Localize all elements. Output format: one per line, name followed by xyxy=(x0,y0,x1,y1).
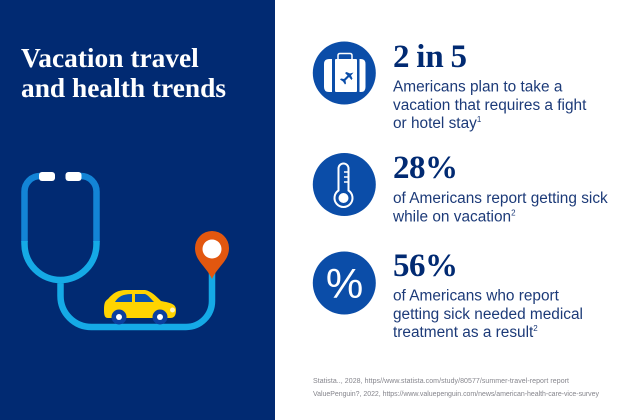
footnotes xyxy=(313,378,600,398)
stat description: 2 xyxy=(533,324,538,333)
stat description: vacation that requires a fight xyxy=(393,97,587,114)
stat description: of Americans who report xyxy=(393,288,560,304)
icon: percent sign: % xyxy=(326,260,363,307)
stat 1: 2 in 5 xyxy=(313,39,587,132)
icon: thermometer xyxy=(313,153,376,216)
stat description: getting sick needed medical xyxy=(393,306,583,323)
stat description: treatment as a result xyxy=(393,324,538,341)
icon: yellow car xyxy=(104,290,176,324)
stat description: Americans plan to take a xyxy=(393,78,563,96)
stat number: 28% xyxy=(393,150,458,186)
stethoscope upper tubes xyxy=(24,176,96,242)
footnote 1: Statista.., 2028, https//www.statista.com/study/80577/summer-travel-report report xyxy=(313,378,569,385)
panel: left navy background xyxy=(0,0,275,420)
icon: location pin xyxy=(195,231,229,279)
stethoscope ear tips xyxy=(39,172,82,181)
stethoscope lower tube and road xyxy=(24,241,212,327)
stat description: 2 xyxy=(511,208,516,218)
icon: percent sign xyxy=(313,252,376,314)
footnote 2: ValuePenguin?, 2022, https://www.valuepenguin.com/news/american-health-care-vice-survey xyxy=(313,391,600,398)
stat number: 56% xyxy=(393,248,458,284)
stat description: 1 xyxy=(477,115,482,124)
stat number: 2 in 5 xyxy=(393,39,467,75)
stat 2: 28% xyxy=(313,150,608,226)
stat description: of Americans report getting sick xyxy=(393,190,608,207)
stat description: or hotel stay xyxy=(393,115,482,132)
title: and health trends xyxy=(21,73,226,103)
icon: suitcase with plane xyxy=(313,42,376,104)
title: Vacation travel xyxy=(21,43,199,73)
icon: stethoscope road with car and pin xyxy=(24,172,229,327)
stat description: while on vacation xyxy=(392,208,516,226)
stat 3: 56% xyxy=(313,248,583,341)
